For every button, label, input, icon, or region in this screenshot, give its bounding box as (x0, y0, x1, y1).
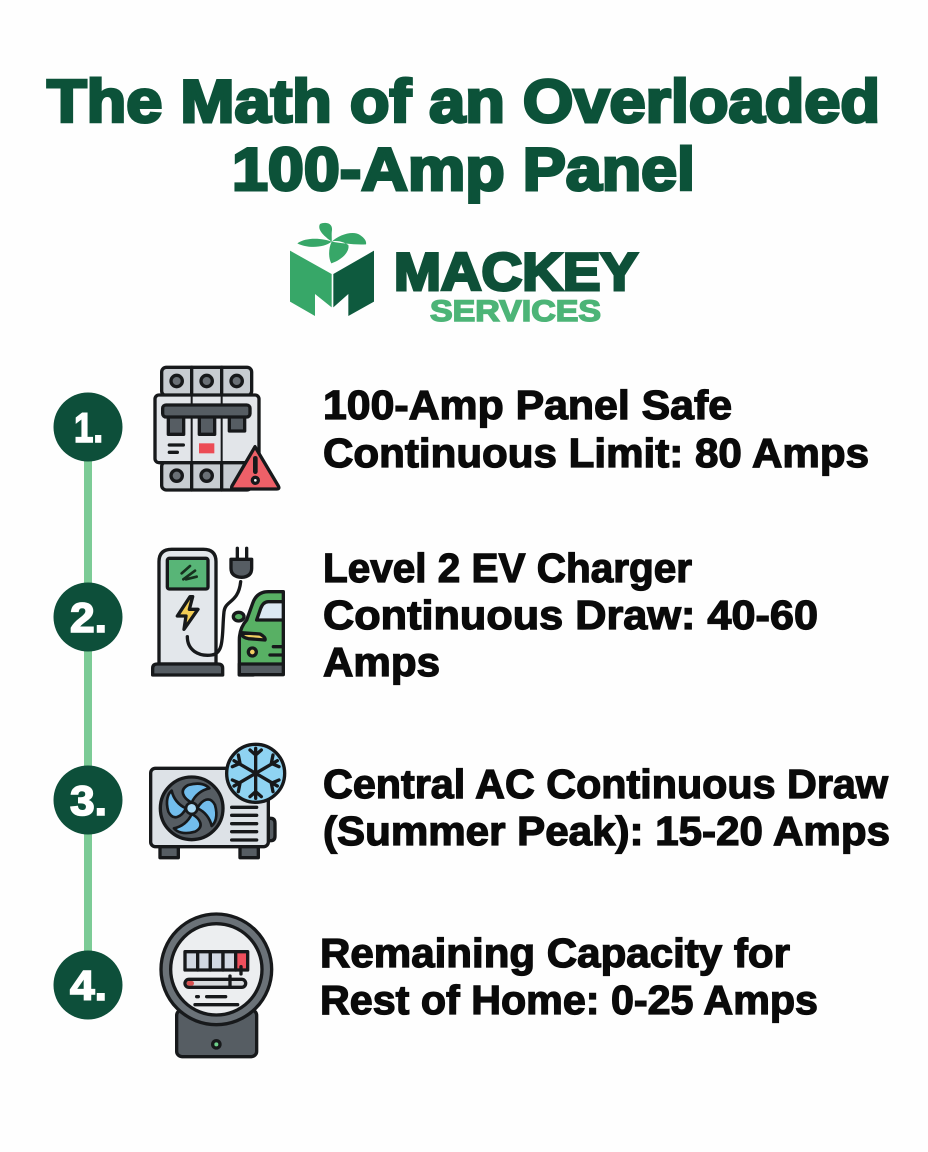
step 1 text (323, 382, 869, 476)
step 4 number (54, 950, 122, 1020)
step 1 text: 100-Amp Panel Safe (323, 382, 732, 428)
icon: circuit breaker with warning (155, 367, 279, 490)
step 2 number: 2. (70, 594, 107, 641)
step 2 number (54, 582, 122, 652)
title: 100-Amp Panel (232, 136, 695, 203)
step 3 text: Central AC Continuous Draw (323, 761, 888, 807)
step 1 number (54, 392, 122, 462)
step 3 number: 3. (70, 777, 107, 824)
step 3 number (54, 766, 122, 834)
step 2 text: Continuous Draw: 40-60 (323, 592, 818, 638)
icon: logo cube with fan (290, 223, 374, 316)
step 3 text (323, 761, 890, 854)
step 3 text: (Summer Peak): 15-20 Amps (323, 808, 890, 854)
logo wordmark: MACKEY (394, 243, 638, 302)
step 4 text: Remaining Capacity for (320, 930, 790, 976)
step 1 text: Continuous Limit: 80 Amps (323, 430, 869, 476)
title (47, 68, 880, 203)
step 1 number: 1. (74, 404, 103, 451)
step 4 text: Rest of Home: 0-25 Amps (320, 977, 818, 1023)
logo: Mackey Services (290, 223, 638, 328)
step 4 text (320, 930, 818, 1023)
step 2 text: Level 2 EV Charger (323, 545, 692, 591)
icon: EV charger and car (153, 548, 283, 675)
step 2 text: Amps (323, 639, 440, 685)
logo subtitle: SERVICES (430, 295, 601, 328)
title: The Math of an Overloaded (47, 68, 880, 135)
timeline connector (84, 427, 92, 985)
step 4 number: 4. (70, 962, 107, 1009)
icon: air conditioner with snowflake (151, 744, 285, 858)
icon: electric meter (161, 914, 272, 1057)
step 2 text (323, 545, 818, 685)
